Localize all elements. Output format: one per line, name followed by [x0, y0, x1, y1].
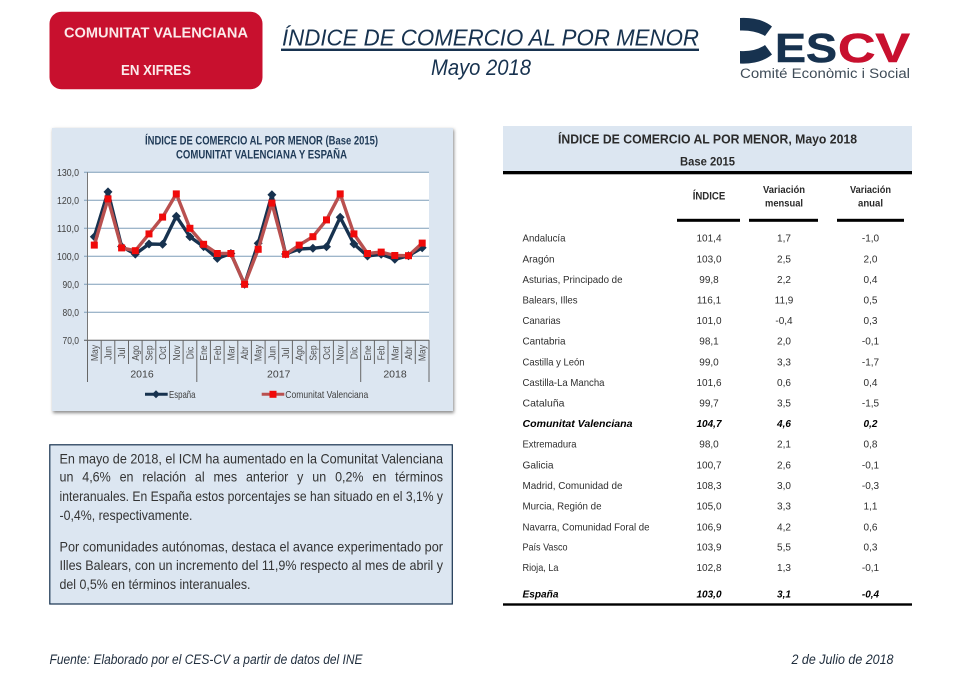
- series: España: [94, 192, 422, 284]
- table rows: 5,5: [777, 542, 791, 553]
- y axis labels: [57, 167, 79, 347]
- column headers: Variación: [850, 185, 891, 196]
- table rows: 99,7: [699, 398, 719, 410]
- text box: commentary: Illes Balears, con un incremento del 11,9% respecto al mes de abril y: [60, 558, 443, 573]
- title: [281, 25, 699, 80]
- table rows: -1,7: [862, 357, 880, 368]
- table rows: 2,0: [864, 254, 878, 265]
- x axis month labels: Ago: [130, 345, 142, 361]
- table rows: -0,1: [862, 460, 880, 471]
- legend: España: [169, 389, 196, 401]
- table rows: Extremadura: [522, 440, 577, 451]
- table rows: España: [522, 589, 559, 600]
- table rows: -0,1: [862, 563, 880, 574]
- table rows: -0,3: [862, 481, 880, 492]
- x axis ticks: [88, 340, 429, 382]
- table rows: 102,8: [696, 563, 722, 574]
- table rows: 104,7: [696, 419, 722, 430]
- text box: commentary: -0,4%, respectivamente.: [60, 508, 192, 523]
- column headers: ÍNDICE: [693, 189, 725, 202]
- x axis year labels: 2018: [383, 369, 407, 381]
- panel: line chart: [52, 128, 454, 413]
- table rows: 1,7: [777, 234, 791, 245]
- table rows: 3,3: [777, 502, 791, 512]
- table rows: Navarra, Comunidad Foral de: [522, 522, 650, 534]
- table rows: 0,3: [864, 542, 878, 553]
- logo: CES-CV: Comité Econòmic i Social: [740, 66, 910, 81]
- table rows: 101,6: [696, 378, 722, 389]
- table rows: 101,0: [696, 316, 722, 327]
- badge: Comunitat Valenciana en xifres: EN XIFRES: [121, 62, 191, 79]
- table rows: -0,4: [775, 316, 793, 327]
- text box: commentary: del 0,5% en términos interanuales.: [60, 577, 250, 592]
- table rows: 103,9: [696, 542, 722, 553]
- x axis month labels: May: [89, 345, 101, 361]
- table rows: 98,0: [699, 440, 719, 451]
- y axis labels: 100,0: [57, 251, 79, 263]
- badge: Comunitat Valenciana en xifres: [50, 12, 262, 89]
- legend: [145, 389, 368, 401]
- table rows: 0,5: [864, 296, 878, 306]
- series: Comunitat Valenciana: [94, 194, 422, 284]
- footer: source: Fuente: Elaborado por el CES-CV a partir de datos del INE: [50, 652, 363, 667]
- column headers: mensual: [765, 199, 803, 210]
- table rows: Asturias, Principado de: [522, 275, 623, 286]
- x axis month labels: Feb: [212, 346, 224, 360]
- y axis labels: 80,0: [62, 307, 79, 319]
- y axis labels: 130,0: [57, 167, 79, 179]
- x axis month labels: Oct: [321, 346, 333, 360]
- table rows: 4,2: [777, 522, 791, 534]
- logo: CES-CV: CV: [838, 25, 911, 71]
- table rows: 1,1: [864, 502, 878, 512]
- text box: commentary: Por comunidades autónomas, destaca el avance experimentado por: [60, 540, 443, 555]
- table rows: 98,1: [699, 337, 719, 348]
- table rows: Canarias: [522, 316, 560, 327]
- x axis month labels: Abr: [403, 346, 415, 360]
- table rows: 2,5: [777, 254, 791, 265]
- table rows: Comunitat Valenciana: [522, 419, 633, 430]
- text box: commentary: un 4,6% en relación al mes anterior y un 0,2% en términos: [60, 470, 443, 485]
- text box: commentary: [50, 445, 452, 604]
- table rows: 108,3: [696, 481, 722, 492]
- table rows: País Vasco: [522, 542, 568, 553]
- y axis labels: 90,0: [62, 279, 79, 291]
- y axis labels: 70,0: [62, 335, 79, 347]
- table header: Base 2015: [680, 155, 735, 169]
- table rows: -1,0: [862, 234, 880, 245]
- plot area with gridlines: [84, 172, 429, 340]
- table rows: Balears, Illes: [522, 296, 578, 306]
- table rows: 100,7: [696, 460, 722, 471]
- x axis month labels: Oct: [157, 346, 169, 360]
- table rows: Madrid, Comunidad de: [522, 481, 623, 492]
- x axis month labels: Ene: [198, 345, 210, 361]
- table rows: 99,0: [699, 357, 719, 368]
- x axis month labels: [89, 345, 429, 361]
- table: regional index: [503, 126, 912, 606]
- y axis labels: 120,0: [57, 195, 79, 207]
- x axis month labels: Abr: [239, 346, 251, 360]
- table rows: Aragón: [522, 254, 555, 265]
- table rows: Murcia, Región de: [522, 502, 602, 512]
- x axis month labels: Jun: [103, 346, 115, 360]
- logo: CES-CV: [740, 18, 911, 81]
- x axis month labels: Feb: [376, 346, 388, 360]
- title: Mayo 2018: [431, 55, 531, 80]
- table rows: 2,2: [777, 275, 791, 286]
- text box: commentary: En mayo de 2018, el ICM ha aumentado en la Comunitat Valenciana: [60, 451, 443, 466]
- x axis month labels: Mar: [390, 345, 402, 360]
- chart title: [145, 134, 378, 161]
- table header: ÍNDICE DE COMERCIO AL POR MENOR, Mayo 2018: [558, 131, 857, 146]
- table rows: 0,2: [864, 419, 878, 430]
- chart title: ÍNDICE DE COMERCIO AL POR MENOR (Base 2015): [145, 134, 378, 147]
- table rows: [522, 234, 880, 600]
- table rows: 3,3: [777, 357, 791, 368]
- x axis year labels: 2016: [130, 369, 154, 381]
- chart title: COMUNITAT VALENCIANA Y ESPAÑA: [176, 148, 348, 161]
- table rows: 2,0: [777, 337, 791, 348]
- column headers: Variación: [763, 185, 805, 196]
- x axis month labels: Nov: [171, 345, 183, 361]
- table rows: Cantabria: [522, 337, 566, 348]
- table rows: 0,4: [864, 275, 878, 286]
- table rows: 103,0: [696, 254, 722, 265]
- y axis labels: 110,0: [57, 223, 79, 235]
- table rows: 99,8: [699, 275, 719, 286]
- legend: Comunitat Valenciana: [285, 389, 368, 401]
- badge: Comunitat Valenciana en xifres: COMUNITAT VALENCIANA: [64, 25, 248, 42]
- x axis month labels: May: [253, 345, 265, 361]
- logo: CES-CV: ES: [775, 25, 837, 71]
- column headers: [677, 185, 904, 222]
- x axis month labels: Dic: [349, 347, 361, 359]
- title: ÍNDICE DE COMERCIO AL POR MENOR: [282, 25, 699, 51]
- table rows: 0,3: [864, 316, 878, 327]
- table rows: 3,5: [777, 398, 791, 410]
- x axis year labels: [130, 369, 407, 381]
- x axis month labels: Sep: [308, 345, 320, 361]
- x axis month labels: May: [417, 345, 429, 361]
- table rows: Castilla-La Mancha: [522, 378, 605, 389]
- table rows: -0,4: [862, 589, 880, 600]
- x axis month labels: Ene: [362, 345, 374, 361]
- table rows: 105,0: [696, 502, 722, 512]
- x axis month labels: Jun: [267, 346, 279, 360]
- table rows: Cataluña: [522, 398, 565, 410]
- table header: [503, 126, 912, 174]
- column headers: anual: [858, 199, 883, 210]
- table rows: 103,0: [696, 589, 722, 600]
- table rows: Galicia: [522, 460, 554, 471]
- table rows: 0,8: [864, 440, 878, 451]
- x axis month labels: Sep: [144, 345, 156, 361]
- table rows: 1,3: [777, 563, 791, 574]
- table rows: -1,5: [862, 398, 880, 410]
- table rows: 116,1: [697, 296, 722, 306]
- x axis month labels: Nov: [335, 345, 347, 361]
- table rows: 0,6: [864, 522, 878, 534]
- x axis month labels: Mar: [226, 345, 238, 360]
- table rows: Rioja, La: [522, 563, 559, 574]
- x axis month labels: Dic: [185, 347, 197, 359]
- text box: commentary: interanuales. En España estos porcentajes se han situado en el 3,1% y: [60, 489, 443, 504]
- table rows: 3,1: [777, 589, 791, 600]
- x axis year labels: 2017: [267, 369, 291, 381]
- table rows: 0,6: [777, 378, 791, 389]
- table rows: 101,4: [696, 234, 722, 245]
- table rows: 3,0: [777, 481, 791, 492]
- footer: date: 2 de Julio de 2018: [791, 652, 894, 667]
- table rows: 2,1: [777, 440, 791, 451]
- table rows: 11,9: [775, 296, 794, 306]
- table rows: 0,4: [864, 378, 878, 389]
- table rows: 2,6: [777, 460, 791, 471]
- x axis month labels: Jul: [116, 348, 128, 358]
- x axis month labels: Jul: [280, 348, 292, 358]
- table rows: 4,6: [776, 419, 791, 430]
- table rows: 106,9: [696, 522, 722, 534]
- table rows: -0,1: [862, 337, 880, 348]
- table rows: Andalucía: [522, 234, 566, 245]
- x axis month labels: Ago: [294, 345, 306, 361]
- table rows: Castilla y León: [522, 357, 585, 368]
